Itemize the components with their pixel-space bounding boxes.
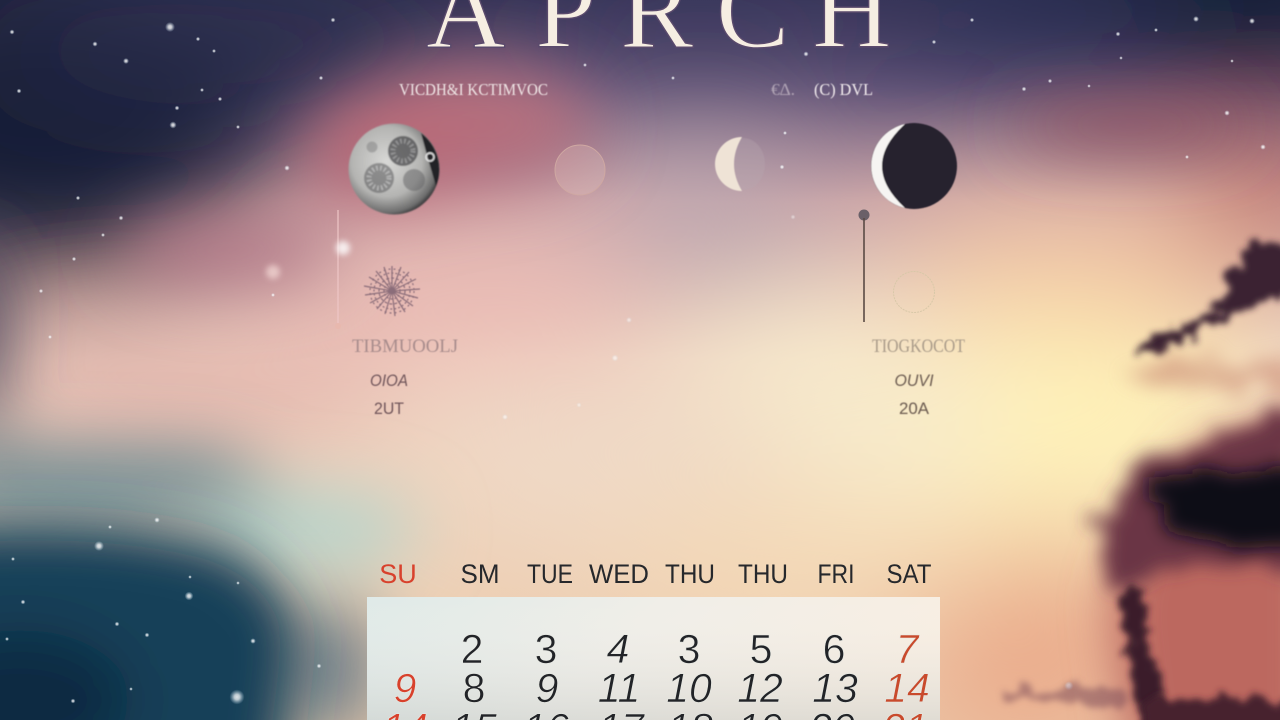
icon: dark moon with white crescent — [871, 123, 957, 209]
calendar weekday header: THU — [738, 559, 788, 589]
row 1: 2 — [461, 626, 483, 672]
label: right moon heading: €∆. — [771, 80, 795, 99]
label: left moon name: TIBMUOOLJ — [352, 336, 458, 357]
label: left date: OIOA — [370, 371, 408, 390]
label: right date: OUVI — [894, 371, 934, 390]
row 1: 4 — [607, 626, 629, 672]
calendar weekday header: THU — [665, 559, 715, 589]
label: right year: 20A — [899, 399, 930, 418]
dark nebula clouds — [1005, 244, 1280, 720]
row 1: 6 — [823, 626, 845, 672]
calendar weekday header: SM — [460, 559, 500, 589]
icon: faint new moon outline — [555, 145, 605, 195]
row 2: 8 — [463, 665, 485, 711]
row 2: 10 — [666, 665, 712, 711]
row 2: 12 — [737, 665, 783, 711]
calendar dates — [382, 626, 930, 720]
left pin line with glow — [266, 210, 350, 329]
label: right moon heading — [771, 80, 873, 99]
label: left year: 2UT — [374, 399, 404, 418]
icon: dandelion burst — [364, 266, 420, 316]
calendar weekday header: FRI — [818, 559, 854, 589]
label: left moon heading: VICDH&I KCTIMVOC — [399, 80, 548, 99]
label: right moon heading: (C) DVL — [814, 80, 873, 99]
row 2: 13 — [812, 665, 858, 711]
calendar panel — [367, 597, 940, 720]
calendar weekday header: TUE — [527, 559, 573, 589]
row 2 — [394, 665, 930, 711]
calendar weekday header — [379, 559, 932, 589]
row 3 — [382, 705, 928, 720]
row 1: 5 — [750, 626, 772, 672]
calendar weekday header: SAT — [886, 559, 932, 589]
row 1: 3 — [678, 626, 700, 672]
right pin line — [858, 210, 870, 322]
icon: faint circle outline — [894, 272, 934, 312]
row 1: 3 — [535, 626, 557, 672]
row 2: 9 — [536, 665, 558, 711]
row 2: 11 — [598, 665, 640, 711]
icon: waxing crescent moon — [715, 137, 765, 191]
label: right moon name: TIOGKOCOT — [872, 336, 965, 357]
icon: full textured moon — [348, 124, 440, 214]
calendar weekday header: SU — [379, 559, 417, 589]
row 2: 14 — [884, 665, 930, 711]
row 1: 7 — [896, 626, 921, 672]
row 2: 9 — [394, 665, 416, 711]
calendar weekday header: WED — [589, 559, 649, 589]
row 1 — [461, 626, 921, 672]
